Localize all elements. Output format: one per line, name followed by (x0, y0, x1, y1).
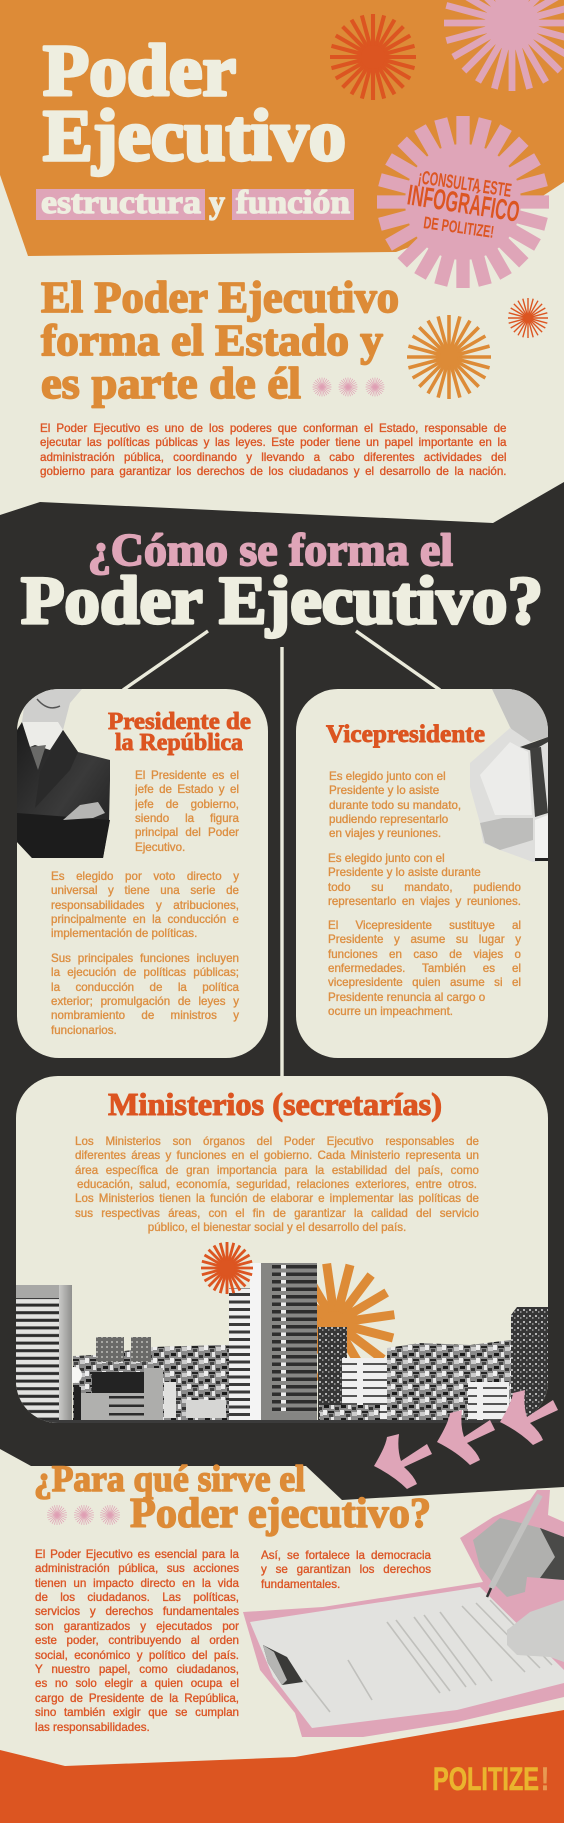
text: purpose right column: fundamentales. (261, 1578, 340, 1591)
text: purpose right column: Así, se fortalece la democracia (261, 1549, 431, 1562)
text: vice election: en viajes y reuniones. (329, 827, 441, 840)
text: purpose left column: cargo de Presidente de la República, (35, 1692, 239, 1705)
text: vice election: Presidente y lo asiste (329, 784, 439, 797)
text: vice assists (328, 852, 530, 914)
subtitle (36, 185, 354, 221)
text block: intro paragraph (40, 422, 515, 482)
heading: Ministerios: Ministerios (secretarías) (108, 1086, 442, 1122)
text: vice substitutes: Presidente renuncia al cargo o (328, 991, 485, 1004)
connector lines (123, 631, 440, 1077)
text: vice substitutes: ocurre un impeachment. (328, 1005, 453, 1018)
text: vice assists: todo su mandato, pudiendo (328, 881, 521, 894)
heading: Cómo se forma (21, 525, 543, 638)
arrows: three pink arrows (374, 1390, 558, 1489)
text: ministries description: público, el bienestar social y el desarrollo del país. (148, 1221, 406, 1234)
text: ministries description: sus respectivas áreas, con el fin de garantizar la calidad del servicio (75, 1207, 479, 1220)
text: ministries description (75, 1135, 487, 1241)
heading: Presidente de la República: Presidente de (108, 709, 251, 735)
text: president election: Es elegido por voto directo y (51, 870, 239, 883)
dark band background (0, 482, 564, 1500)
footer red band (0, 1710, 564, 1823)
text: president role: jefe de Estado y el (135, 783, 239, 796)
text: purpose left column: servicios y derechos fundamentales (35, 1605, 239, 1618)
icon: orange sunburst (407, 315, 491, 399)
text: purpose right column (261, 1549, 439, 1597)
text: purpose left column: de los ciudadanos. Las políticas, (35, 1591, 239, 1604)
text: purpose left column: social, económico y político del país. (35, 1649, 239, 1662)
text: purpose left column: El Poder Ejecutivo es esencial para la (35, 1548, 239, 1561)
heading: Cómo se forma: ¿Cómo se forma el (88, 525, 453, 575)
callout: pink badge: DE POLITIZE! (422, 213, 495, 242)
title: Poder (43, 30, 236, 111)
text: vice substitutes: enfermedades. También es el (328, 962, 521, 975)
heading: Cómo se forma: Poder Ejecutivo? (21, 562, 543, 638)
text: president functions: exterior; promulgación de leyes y (51, 995, 239, 1008)
text: president role: jefe de gobierno, (135, 798, 239, 811)
text: vice substitutes: funciones en caso de viajes o (328, 948, 521, 961)
text: president functions: funcionarios. (51, 1024, 117, 1037)
text: president role (135, 769, 247, 859)
text: purpose left column: las responsabilidades. (35, 1721, 150, 1734)
text: purpose left column: Y nuestro papel, como ciudadanos, (35, 1663, 239, 1676)
text: vice election: durante todo su mandato, (329, 799, 461, 812)
heading: forma el Estado: es parte de él (41, 359, 301, 408)
heading: Presidente de la República: la República (115, 730, 243, 756)
text: president functions: la ejecución de políticas públicas; (51, 966, 239, 979)
text: president role: Ejecutivo. (135, 841, 185, 854)
text: president role: El Presidente es el (135, 769, 239, 782)
text: purpose left column (35, 1548, 247, 1738)
text: purpose left column: este poder, contribuyendo al orden (35, 1634, 239, 1647)
text block: intro paragraph: gobierno para garantizar los derechos de los ciudadanos y el desarrollo de la nación. (40, 465, 506, 478)
icon: three small pink bursts (312, 378, 384, 396)
text: vice assists: Presidente y lo asiste durante (328, 866, 481, 879)
photo: city skyline (16, 1263, 548, 1423)
heading: forma el Estado: forma el Estado y (41, 316, 383, 365)
text: purpose left column: tienen un impacto directo en la vida (35, 1577, 239, 1590)
icon: orange sunburst behind city (276, 1264, 394, 1382)
text: purpose left column: es no solo elegir a quien ocupa el (35, 1677, 239, 1690)
icon: red sunburst (330, 14, 416, 100)
icon: small red sunburst (508, 298, 548, 338)
text: vice substitutes: El Vicepresidente sustituye al (328, 919, 521, 932)
text: vice assists: representarlo en viajes y reuniones. (328, 895, 521, 908)
heading: Vicepresidente: Vicepresidente (326, 721, 485, 748)
text: vice substitutes (328, 919, 530, 1023)
panel: ministries (16, 1076, 548, 1423)
heading: forma el Estado (41, 273, 399, 408)
title: Ejecutivo (43, 95, 346, 176)
text: president functions (51, 952, 247, 1042)
subtitle: estructura (41, 185, 201, 221)
text: president functions: la conducción de la política (51, 981, 239, 994)
text: purpose left column: sino también exigir que se cumplan (35, 1706, 239, 1719)
text: president election: implementación de políticas. (51, 927, 197, 940)
text block: intro paragraph: ejecutar las políticas públicas y las leyes. Este poder tiene un papel importante en la (40, 436, 506, 449)
text: ministries description: educación, salud, economía, seguridad, relaciones exteriores, entre otros. (77, 1178, 477, 1191)
text: vice assists: Es elegido junto con el (328, 852, 445, 865)
text: president election: principalmente en la conducción e (51, 913, 239, 926)
title (43, 30, 346, 176)
text: ministries description: área específica de gran importancia para la estabilidad del país, como (75, 1164, 479, 1177)
text: ministries description: Los Ministerios son órganos del Poder Ejecutivo responsables de (75, 1135, 479, 1148)
heading: Para qué sirve: Poder ejecutivo? (130, 1491, 431, 1537)
heading: Para qué sirve: ¿Para qué sirve el (34, 1459, 305, 1500)
panel: president (17, 689, 268, 1058)
icon: pink sunburst top right (444, 0, 564, 91)
subtitle: función (236, 185, 350, 221)
logo: Politize: ! (541, 1761, 549, 1797)
text: ministries description: Los Ministerios tienen la función de elaborar e implementar las políticas de (75, 1192, 479, 1205)
text: vice substitutes: vicepresidente quien asume si el (328, 976, 521, 989)
subtitle: y (209, 185, 225, 221)
photo: president with crossed arms (17, 689, 110, 858)
text: purpose left column: administración pública, sus acciones (35, 1562, 239, 1575)
text: president role: principal del Poder (135, 826, 239, 839)
photo: vice president in shirt and tie (470, 689, 548, 862)
icon: three pink bursts (47, 1505, 120, 1525)
text: president role: siendo la figura (135, 812, 239, 825)
text: purpose right column: y se garantizan los derechos (261, 1563, 431, 1576)
text: president election: responsabilidades y atribuciones, (51, 899, 239, 912)
heading: forma el Estado: El Poder Ejecutivo (41, 273, 399, 322)
text: vice substitutes: Presidente y asume su lugar y (328, 933, 521, 946)
text: vice election (329, 770, 479, 846)
text: president functions: Sus principales funciones incluyen (51, 952, 239, 965)
text: purpose left column: son garantizados y ejecutados por (35, 1620, 239, 1633)
text: vice election: Es elegido junto con el (329, 770, 446, 783)
heading: Para qué sirve (34, 1459, 431, 1537)
header orange banner (0, 0, 564, 256)
text: vice election: pudiendo representarlo (329, 813, 448, 826)
panel: vice president (296, 689, 548, 1058)
heading: Presidente de la República (108, 709, 251, 756)
text block: intro paragraph: El Poder Ejecutivo es uno de los poderes que conforman el Estado, responsable de (40, 422, 506, 435)
text: ministries description: diferentes áreas y funciones en el gobierno. Cada Ministerio representa un (75, 1149, 479, 1162)
icon: red sunburst over city (201, 1242, 253, 1294)
callout: pink badge (377, 116, 549, 288)
text: president functions: nombramiento de ministros y (51, 1009, 239, 1022)
text block: intro paragraph: administración pública, coordinando y llevando a cabo diferentes actividades del (40, 451, 506, 464)
text: president election: universal y tiene una serie de (51, 884, 239, 897)
photo: hands signing document on clipboard (243, 1490, 564, 1737)
text: president election (51, 870, 247, 946)
